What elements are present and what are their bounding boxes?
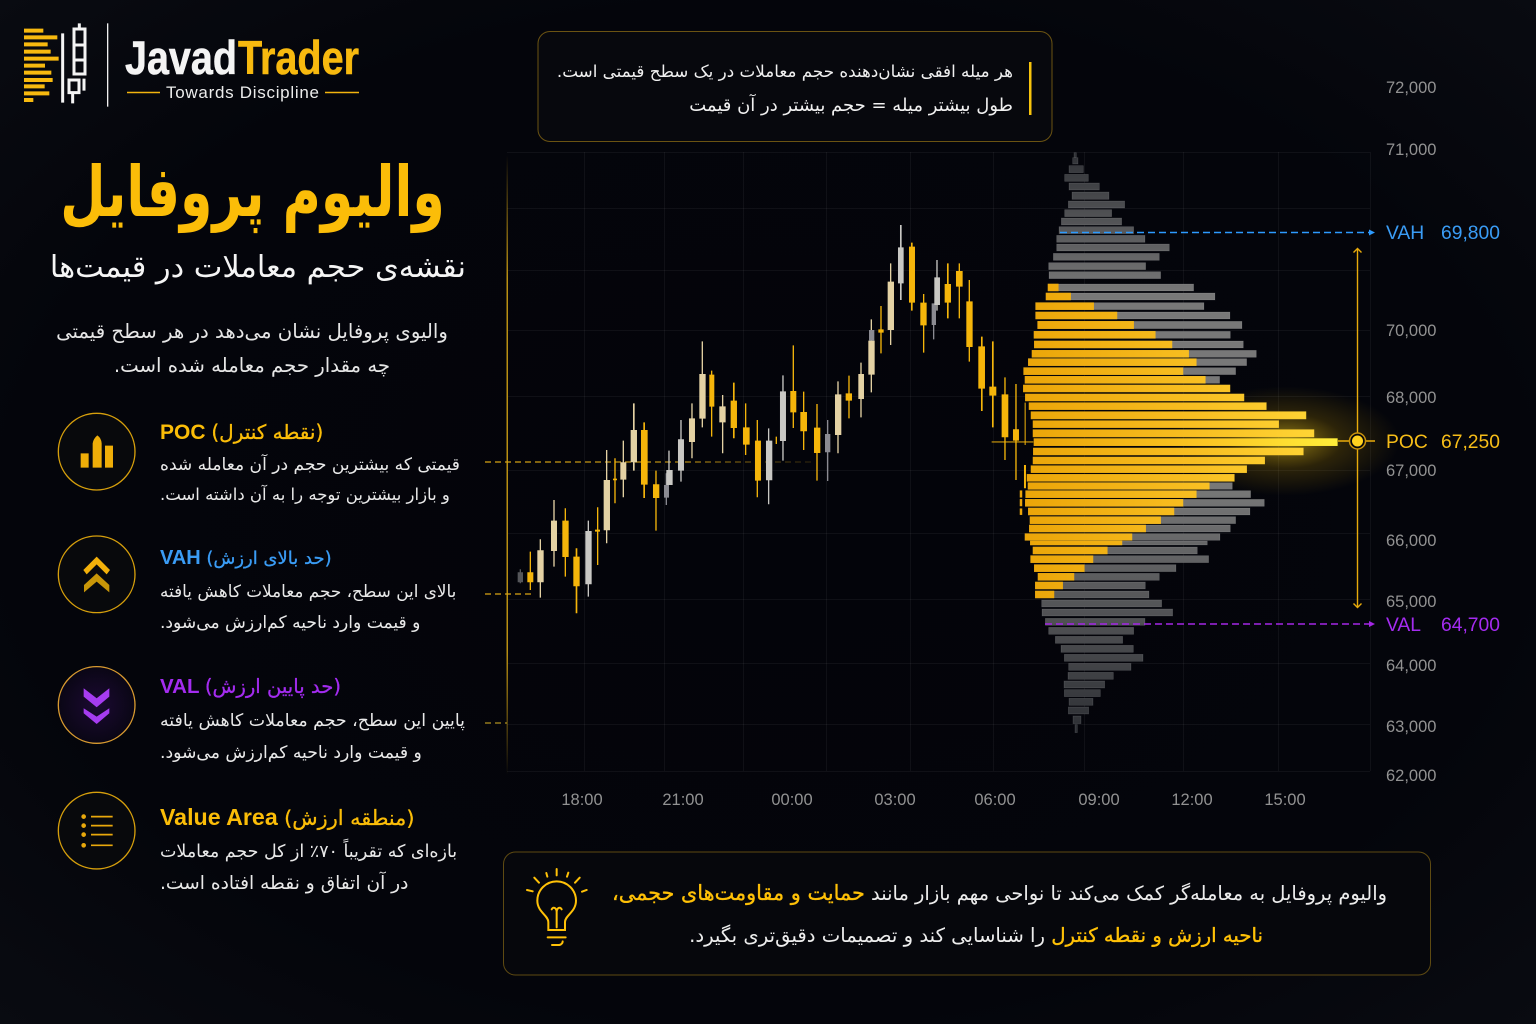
price axis: 62,000: [1386, 767, 1436, 785]
VAH label: 69,800: [1441, 223, 1500, 244]
icon: POC bars: [58, 413, 135, 490]
left axis line: [506, 155, 508, 775]
POC guide line: [485, 461, 815, 463]
time axis: 15:00: [1264, 791, 1306, 809]
time axis: 00:00: [771, 791, 813, 809]
VAH text line 2: و قیمت وارد ناحیه کم‌ارزش می‌شود.: [160, 613, 420, 633]
main title: والیوم پروفایل: [60, 151, 444, 233]
bottom callout line 2: ناحیه ارزش و نقطه کنترل را شناسایی کند و تصمیمات دقیق‌تری بگیرد.: [689, 924, 1263, 947]
top callout box: [538, 32, 1052, 142]
time axis: 21:00: [662, 791, 704, 809]
POC label: 67,250: [1441, 432, 1500, 453]
Value Area heading: Value Area (منطقه ارزش): [160, 804, 414, 830]
price axis: 68,000: [1386, 389, 1436, 407]
price axis: 65,000: [1386, 593, 1436, 611]
intro text: چه مقدار حجم معامله شده است.: [114, 354, 390, 377]
VAL label: [1386, 615, 1500, 636]
price axis: 63,000: [1386, 718, 1436, 736]
candlesticks right part: [800, 225, 1033, 488]
time axis: 03:00: [874, 791, 916, 809]
price axis: 71,000: [1386, 141, 1436, 159]
top callout line 2: طول بیشتر میله = حجم بیشتر در آن قیمت: [689, 95, 1013, 116]
VAH text line 1: بالای این سطح، حجم معاملات کاهش یافته: [160, 581, 456, 601]
POC bar: [1034, 438, 1338, 446]
price axis: 64,000: [1386, 657, 1436, 675]
logo wordmark: Trader: [238, 31, 359, 84]
time axis: [561, 791, 1306, 809]
VAL heading: VAL (حد پایین ارزش): [160, 675, 341, 698]
volume profile lower half: [1020, 448, 1303, 733]
price axis: 70,000: [1386, 322, 1436, 340]
VAH line: [1060, 230, 1375, 236]
POC heading: POC (نقطه کنترل): [160, 420, 323, 444]
price axis: [1386, 79, 1436, 785]
POC label: POC: [1386, 432, 1428, 453]
chart grid: [507, 152, 1370, 772]
bottom callout box: [504, 852, 1430, 975]
time axis: 18:00: [561, 791, 603, 809]
time axis: 12:00: [1171, 791, 1213, 809]
icon: value area list: [58, 792, 135, 869]
candlesticks left part: [518, 341, 796, 613]
volume profile upper half: [1023, 153, 1338, 446]
top callout line 1: هر میله افقی نشان‌دهنده حجم معاملات در یک سطح قیمتی است.: [557, 61, 1013, 81]
intro text: والیوی پروفایل نشان می‌دهد در هر سطح قیمتی: [56, 320, 448, 343]
logo wordmark: [125, 31, 359, 102]
VAL guide line: [485, 722, 507, 724]
VAH label: [1386, 223, 1500, 244]
VAL label: 64,700: [1441, 615, 1500, 636]
logo wordmark: Javad: [125, 31, 237, 84]
POC marker: [1338, 433, 1375, 449]
POC label: [1386, 432, 1500, 453]
VAL line: [1045, 621, 1375, 627]
icon: VAL chevrons: [58, 667, 135, 743]
bottom callout line 1: والیوم پروفایل به معامله‌گر کمک می‌کند تا نواحی مهم بازار مانند حمایت و مقاومت‌های حجمی،: [612, 881, 1387, 905]
value area arrow: [1354, 248, 1362, 608]
Value Area text line 1: بازه‌ای که تقریباً ۷۰٪ از کل حجم معاملات: [160, 842, 457, 862]
time axis: 06:00: [974, 791, 1016, 809]
VAH label: VAH: [1386, 223, 1424, 244]
icon: VAH chevrons: [58, 536, 135, 613]
VAL label: VAL: [1386, 615, 1421, 636]
VAL text line 2: و قیمت وارد ناحیه کم‌ارزش می‌شود.: [160, 743, 422, 763]
VAL text line 1: پایین این سطح، حجم معاملات کاهش یافته: [160, 711, 465, 731]
price axis: 67,000: [1386, 462, 1436, 480]
price axis: 66,000: [1386, 532, 1436, 550]
intro text: [56, 320, 448, 377]
POC text line 2: و بازار بیشترین توجه را به آن داشته است.: [160, 485, 450, 504]
VAH guide line: [485, 593, 532, 595]
POC glow: [1170, 386, 1400, 496]
time axis: 09:00: [1078, 791, 1120, 809]
Value Area text line 2: در آن اتفاق و نقطه افتاده است.: [160, 873, 408, 894]
logo icon: [24, 23, 108, 107]
POC text line 1: قیمتی که بیشترین حجم در آن معامله شده: [160, 455, 460, 475]
price chart: [485, 152, 1400, 775]
VAH heading: VAH (حد بالای ارزش): [160, 547, 332, 569]
icon: light bulb: [527, 869, 587, 945]
price axis: 72,000: [1386, 79, 1436, 97]
logo wordmark: Towards Discipline: [166, 83, 319, 102]
subtitle: نقشه‌ی حجم معاملات در قیمت‌ها: [50, 250, 466, 285]
